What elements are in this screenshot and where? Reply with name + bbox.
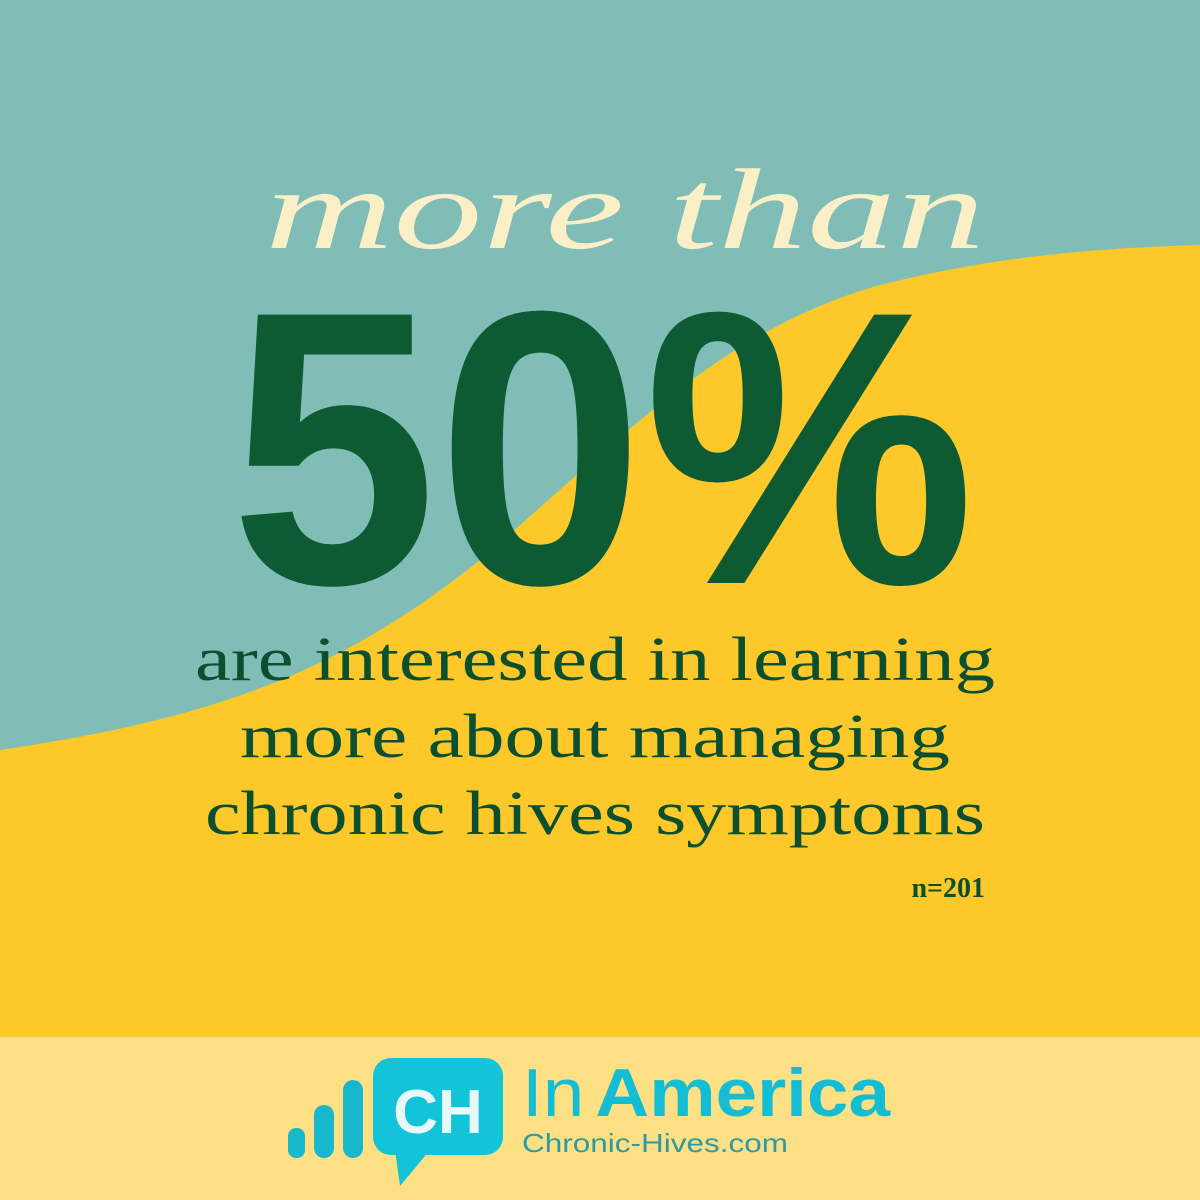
icon: signal bars [288, 1080, 363, 1158]
description text [195, 626, 995, 848]
brand name: InAmerica [522, 1055, 891, 1131]
big stat 50%: 50% [230, 230, 975, 666]
yellow wave [0, 245, 1200, 1040]
description text: chronic hives symptoms [205, 780, 985, 848]
description text: are interested in learning [195, 626, 995, 694]
website: Chronic-Hives.com [522, 1128, 788, 1158]
icon: CH speech bubble [373, 1058, 503, 1186]
footer band [0, 1037, 1200, 1200]
icon: CH speech bubble: CH [393, 1078, 483, 1147]
sample size: n=201 [911, 873, 985, 904]
description text: more about managing [240, 703, 950, 771]
logo [288, 1055, 891, 1186]
handwritten heading: more than: more than [265, 146, 985, 273]
